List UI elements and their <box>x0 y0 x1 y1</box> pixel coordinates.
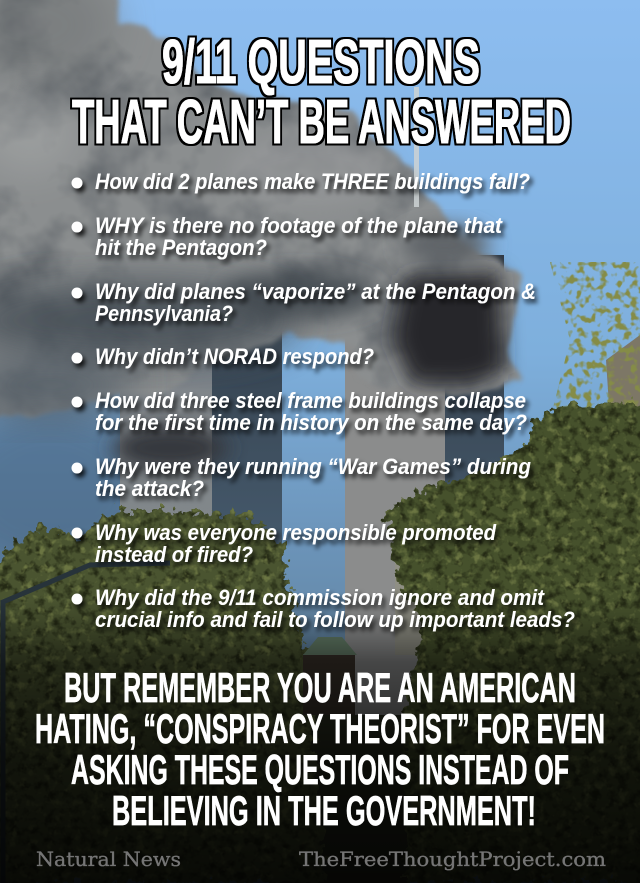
question 7: instead of fired? <box>95 542 253 567</box>
question 8 <box>72 585 575 632</box>
dark bottom overlay <box>0 600 640 883</box>
source credit: TheFreeThoughtProject.com: TheFreeThoughtProject.com <box>299 847 606 871</box>
question 6: Why were they running “War Games” during <box>95 454 532 479</box>
question list <box>72 169 575 632</box>
source credit: Natural News: Natural News <box>36 847 181 871</box>
question 2: WHY is there no footage of the plane that <box>95 213 504 238</box>
street lamp <box>3 563 170 883</box>
trees on the right <box>385 405 640 883</box>
question 3 <box>72 279 536 326</box>
right tower <box>345 255 504 720</box>
sparse branches upper right <box>550 262 640 430</box>
tan buildings behind trees <box>280 335 640 883</box>
question 1: How did 2 planes make THREE buildings fall? <box>95 169 530 194</box>
question 5: How did three steel frame buildings collapse <box>95 388 526 413</box>
left tower <box>120 240 282 720</box>
question 7 <box>72 520 497 567</box>
antenna <box>414 87 419 207</box>
distant building with green roof <box>303 637 357 715</box>
haze on lower left sky <box>0 400 160 580</box>
trees on the left <box>0 510 325 883</box>
question 5 <box>72 388 527 435</box>
question 3: Why did planes “vaporize” at the Pentagon & <box>95 279 536 304</box>
title <box>72 28 571 157</box>
smoke cloud <box>0 0 515 472</box>
closing statement <box>35 664 605 834</box>
question 8: crucial info and fail to follow up important leads? <box>95 607 575 632</box>
question 5: for the first time in history on the same day? <box>95 410 527 435</box>
question 3: Pennsylvania? <box>95 301 233 326</box>
question 8: Why did the 9/11 commission ignore and omit <box>95 585 546 610</box>
question 2: hit the Pentagon? <box>95 235 267 260</box>
question 4: Why didn’t NORAD respond? <box>95 344 374 369</box>
question 2 <box>72 213 504 260</box>
question 6: the attack? <box>95 476 204 501</box>
question 7: Why was everyone responsible promoted <box>95 520 497 545</box>
question 6 <box>72 454 532 501</box>
